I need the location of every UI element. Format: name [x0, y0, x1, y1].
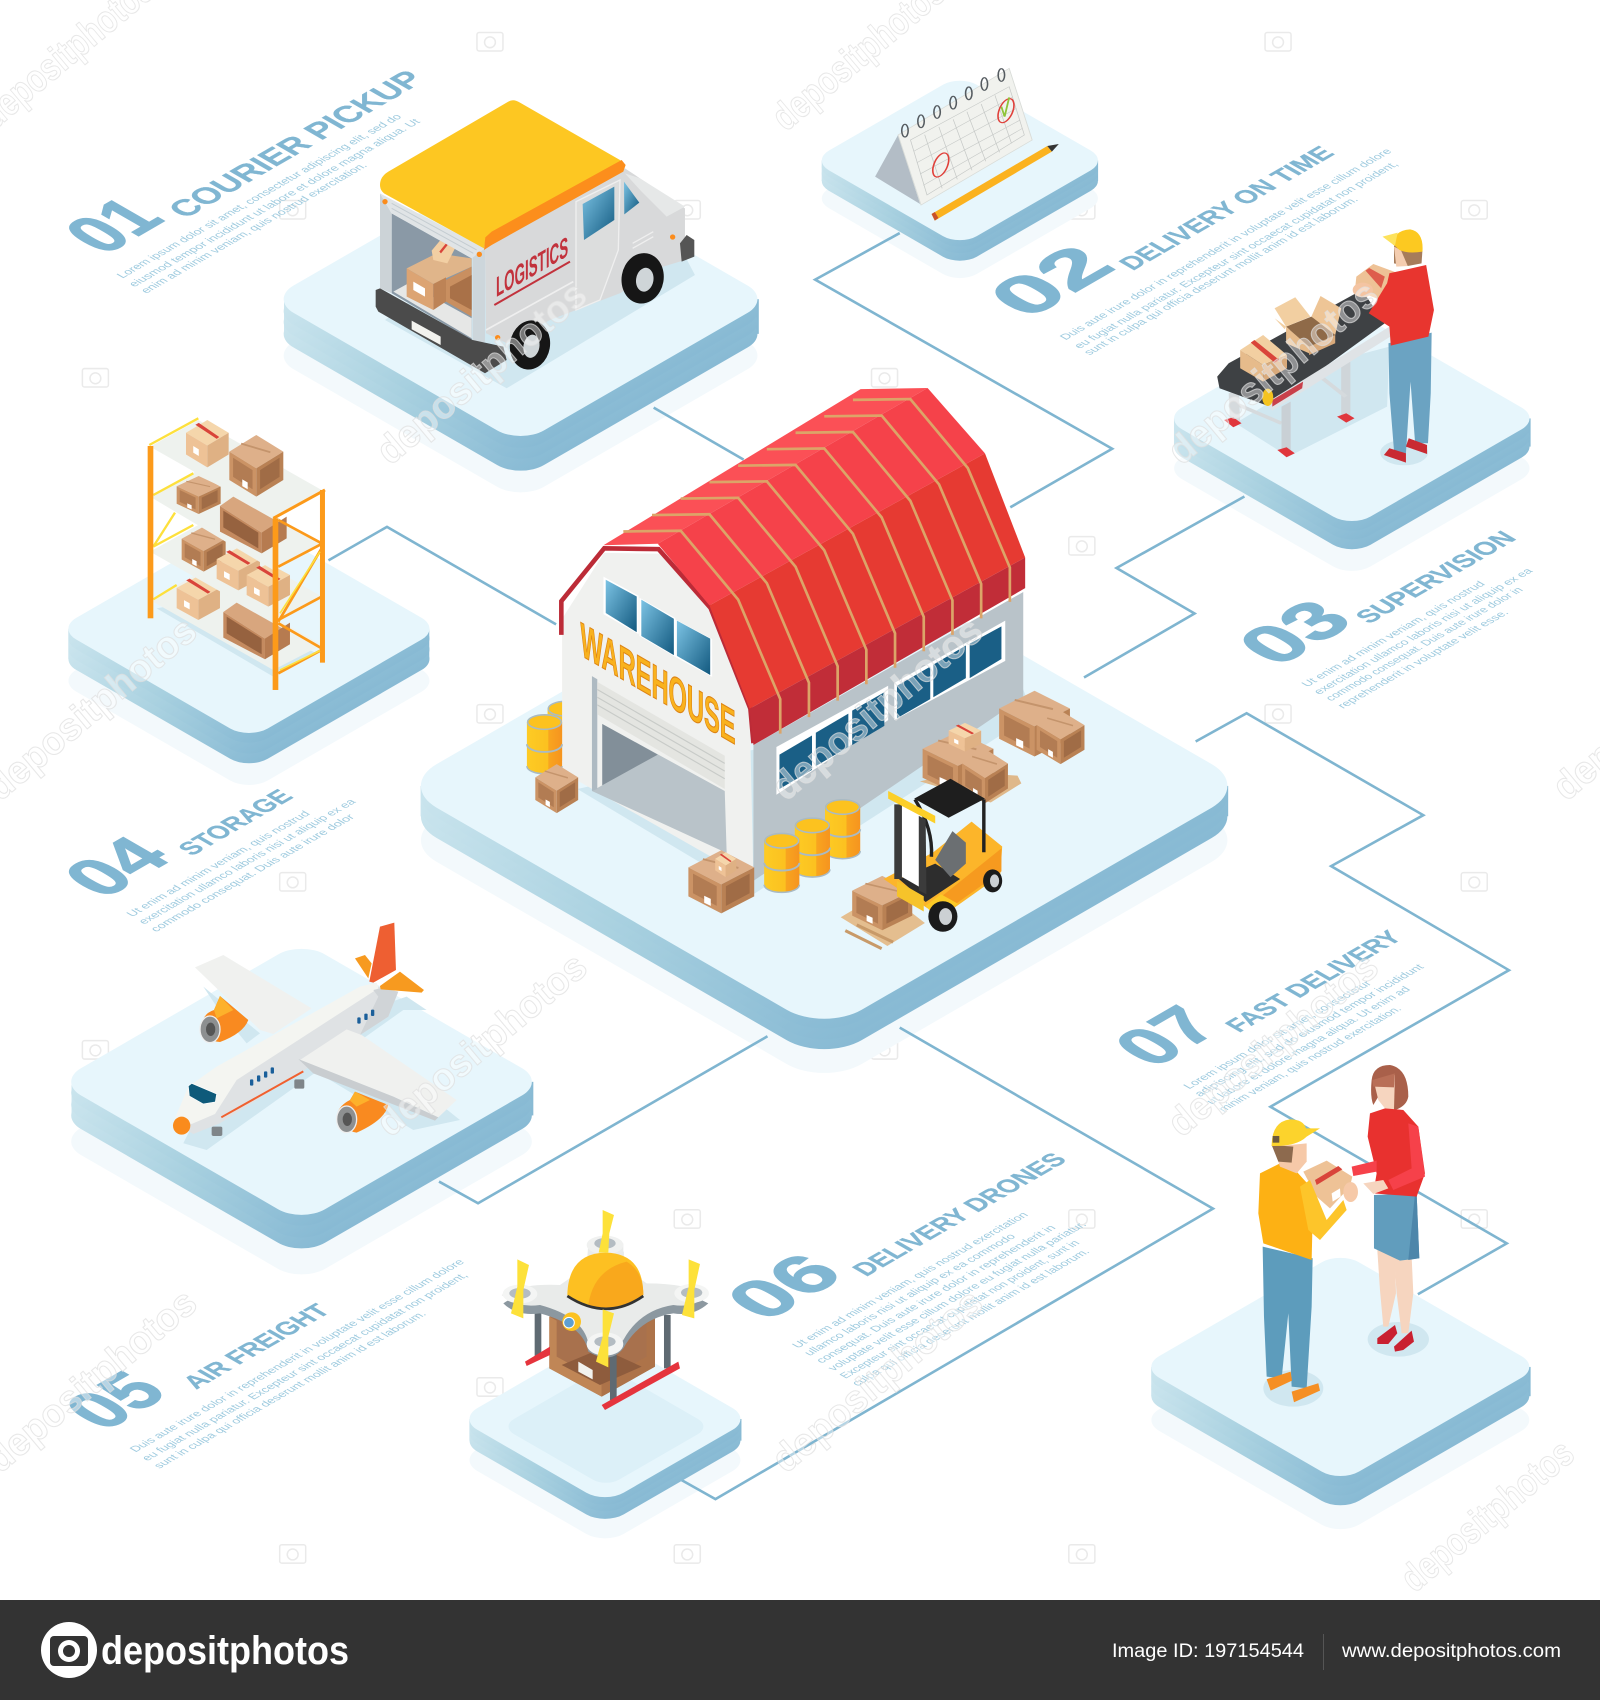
- warehouse sign: WAREHOUSE: [580, 613, 736, 756]
- illustration: desk calendar and pencil: [875, 68, 1059, 221]
- step 06 text: delivery drones: voluptate velit esse cillum dolore eu fugiat nulla pariatur.: [826, 1220, 1090, 1373]
- illustration: courier and customer: [1258, 1065, 1429, 1407]
- step 03 text: supervision: [1219, 527, 1536, 710]
- image id: Image ID: 197154544: [1112, 1641, 1304, 1662]
- step 04 text: storage: exercitation ullamco laboris nisi ut aliquip ex ea: [136, 797, 360, 926]
- step 07 text: fast delivery: minim veniam, quis nostrud exercitation.: [1216, 1005, 1405, 1114]
- website url: www.depositphotos.com: [1341, 1641, 1561, 1662]
- forklift with pallet: [841, 779, 1002, 949]
- platform drop shadows: [57, 113, 1541, 1545]
- step 06 text: delivery drones: Excepteur sint occaecat cupidatat non proident, sunt in: [838, 1239, 1083, 1380]
- footer bar: [0, 1600, 1600, 1700]
- step 07 text: fast delivery: FAST DELIVERY: [1218, 926, 1408, 1036]
- step 03 text: supervision: commodo consequat. Duis aute irure dolor in: [1323, 586, 1526, 703]
- panel: central warehouse: [399, 388, 1249, 1062]
- diagonal depositphotos watermarks: depositphotos: [1160, 273, 1387, 473]
- step 01 text: courier pickup: Lorem ipsum dolor sit amet, consectetur adipiscing elit, sed do: [115, 113, 405, 280]
- panel: storage shelves: [57, 418, 440, 770]
- illustration: cargo plane: [173, 923, 460, 1150]
- platform: conveyor: [1163, 309, 1541, 556]
- step 04 text: storage: 04: [45, 826, 187, 908]
- platform: warehouse: [399, 540, 1249, 1062]
- step 06 text: delivery drones: ullamco laboris nisi ut aliquip ex ea commodo: [802, 1232, 1019, 1358]
- step 06 text: delivery drones: DELIVERY DRONES: [845, 1148, 1073, 1280]
- platform: handover: [1140, 1251, 1540, 1512]
- panel: supervision conveyor: [1163, 229, 1541, 556]
- panel: fast delivery handover: [1140, 1065, 1540, 1512]
- step 03 text: supervision: SUPERVISION: [1348, 527, 1523, 627]
- step 03 text: supervision: exercitation ullamco laboris nisi ut aliquip ex ea: [1311, 566, 1536, 696]
- platform: air freight: [57, 941, 546, 1256]
- panel: air freight: [57, 923, 546, 1256]
- platform: drone: [459, 1334, 751, 1525]
- panel: courier pickup van: [270, 100, 771, 479]
- step 07 text: fast delivery: ut labore et dolore magna aliqua. Ut enim ad: [1204, 985, 1414, 1106]
- step 05 text: air freight: [46, 1258, 471, 1470]
- diagonal depositphotos watermarks: depositphotos: [1160, 945, 1387, 1145]
- step 06 text: delivery drones: 06: [707, 1242, 860, 1330]
- van lettering: LOGISTICS: [496, 231, 568, 304]
- watermark camera icons: [82, 33, 1487, 1563]
- warehouse roof: [561, 388, 1025, 745]
- illustration: delivery van: [376, 100, 695, 388]
- cargo boxes: [535, 691, 1084, 913]
- platform: van: [270, 154, 771, 479]
- step 03 text: supervision: Ut enim ad minim veniam, quis nostrud: [1300, 580, 1488, 689]
- step 07 text: fast delivery: [1095, 926, 1428, 1114]
- barrels: [527, 714, 860, 892]
- step 06 text: delivery drones: consequat. Duis aute irure dolor in reprehenderit in: [814, 1224, 1059, 1365]
- step 06 text: delivery drones: culpa qui officia deserunt mollit anim id est laborum.: [850, 1248, 1093, 1388]
- illustration: worker at conveyor belt: [1217, 229, 1434, 465]
- step 02 text: delivery on time: 02: [970, 234, 1132, 328]
- step 06 text: delivery drones: Ut enim ad minim veniam, quis nostrud exercitation: [790, 1211, 1031, 1350]
- step 01 text: courier pickup: eiusmod tempor incididunt ut labore et dolore magna aliqua. Ut: [127, 117, 424, 289]
- step 05 text: air freight: 05: [46, 1361, 184, 1440]
- step 07 text: fast delivery: Lorem ipsum dolor sit amet, consectetur: [1181, 979, 1375, 1091]
- step 05 text: air freight: AIR FREIGHT: [175, 1300, 337, 1393]
- platform: storage: [57, 518, 440, 770]
- step 02 text: delivery on time: [970, 142, 1401, 357]
- figure: customer: [1352, 1065, 1425, 1352]
- cargo inside van: [407, 241, 472, 317]
- diagonal depositphotos watermarks: depositphotos: [368, 273, 595, 473]
- step 01 text: courier pickup: [46, 66, 432, 295]
- step 02 text: delivery on time: DELIVERY ON TIME: [1112, 142, 1341, 274]
- platform: calendar: [812, 75, 1108, 266]
- figure: courier: [1258, 1119, 1358, 1402]
- panel: delivery drone: [459, 1210, 751, 1525]
- step 05 text: air freight: Duis aute irure dolor in reprehenderit in voluptate velit esse cillum dolore: [128, 1258, 468, 1454]
- illustration: drone carrying crate: [502, 1210, 709, 1410]
- panel: delivery on time calendar: [812, 68, 1108, 266]
- diagonal depositphotos watermarks: depositphotos: [368, 945, 595, 1145]
- diagonal depositphotos watermarks: depositphotos: [764, 1281, 991, 1481]
- step 06 text: delivery drones: [707, 1148, 1093, 1388]
- step 04 text: storage: commodo consequat. Duis aute irure dolor: [148, 813, 358, 934]
- connector lines: [328, 233, 1509, 1499]
- diagonal depositphotos watermarks: depositphotos: [764, 609, 991, 809]
- step 05 text: air freight: sunt in culpa qui officia deserunt mollit anim id est laborum.: [152, 1310, 429, 1470]
- illustration: warehouse building: [527, 388, 1084, 949]
- step 04 text: storage: [45, 785, 360, 934]
- step 07 text: fast delivery: adipiscing elit, sed do eiusmod tempor incididunt: [1192, 963, 1428, 1099]
- step 04 text: storage: Ut enim ad minim veniam, quis nostrud: [124, 810, 313, 919]
- step 02 text: delivery on time: eu fugiat nulla pariatur. Excepteur sint occaecat cupidatat non proident,: [1072, 160, 1401, 351]
- step 02 text: delivery on time: Duis aute irure dolor in reprehenderit in voluptate velit esse cillum dolore: [1058, 147, 1395, 342]
- footer logo icon: [41, 1622, 97, 1678]
- step 01 text: courier pickup: COURIER PICKUP: [160, 66, 432, 222]
- illustration: pallet rack with boxes: [148, 418, 325, 690]
- step 03 text: supervision: reprehenderit in voluptate velit esse.: [1335, 609, 1512, 710]
- step 01 text: courier pickup: 01: [46, 187, 180, 264]
- step 04 text: storage: STORAGE: [171, 785, 299, 859]
- step 02 text: delivery on time: sunt in culpa qui officia deserunt mollit anim id est laborum.: [1082, 195, 1361, 357]
- step 01 text: courier pickup: enim ad minim veniam, quis nostrud exercitation.: [139, 161, 370, 295]
- step 03 text: supervision: 03: [1219, 589, 1370, 676]
- step 07 text: fast delivery: 07: [1095, 995, 1237, 1077]
- footer logo wordmark: depositphotos: [101, 1629, 349, 1673]
- step 05 text: air freight: eu fugiat nulla pariatur. Excepteur sint occaecat cupidatat non proident,: [140, 1271, 471, 1463]
